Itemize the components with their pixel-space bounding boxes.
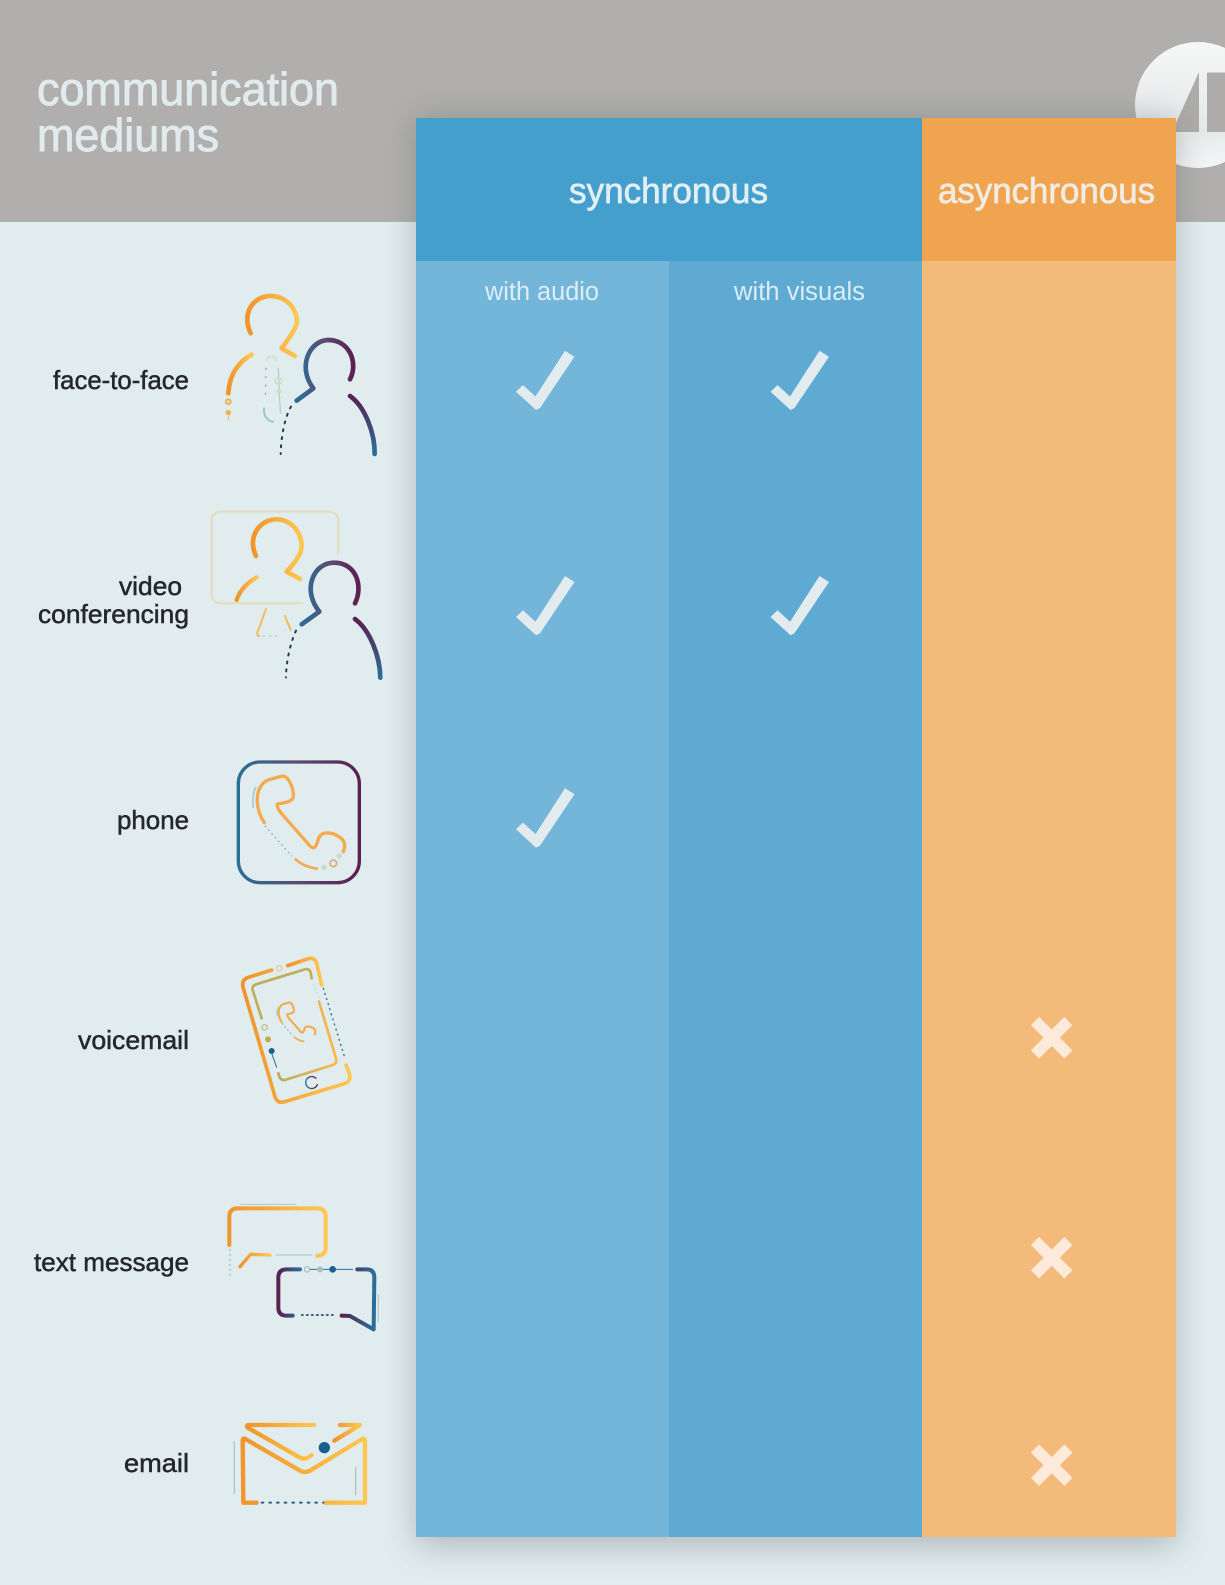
column: with visuals xyxy=(669,261,922,1537)
label: email: email xyxy=(124,1448,189,1478)
icon: text message xyxy=(229,1204,378,1329)
logo circle xyxy=(1135,42,1225,168)
title xyxy=(37,63,339,161)
panel: synchronous header xyxy=(416,118,922,261)
check: video audio xyxy=(516,576,574,635)
panel: synchronous header: synchronous xyxy=(569,170,768,211)
column: with audio xyxy=(416,261,669,1537)
label: video conferencing: video xyxy=(119,571,182,601)
icon: video conferencing xyxy=(212,512,380,678)
icon: voicemail xyxy=(243,958,350,1102)
cross: email xyxy=(1035,1448,1068,1482)
icon: phone xyxy=(238,762,359,883)
title: communication xyxy=(37,63,339,115)
table shadow xyxy=(416,118,1176,1546)
column: with audio: with audio xyxy=(484,278,599,306)
check: phone audio xyxy=(516,788,574,848)
title: mediums xyxy=(37,109,219,161)
panel: asynchronous header: asynchronous xyxy=(938,170,1155,211)
cross: voicemail xyxy=(1035,1021,1068,1054)
label: voicemail: voicemail xyxy=(78,1025,189,1055)
cross: text message xyxy=(1035,1241,1068,1274)
check: face-to-face visuals xyxy=(770,351,829,410)
label: text message: text message xyxy=(34,1247,189,1277)
check: face-to-face audio xyxy=(516,351,574,410)
label: video conferencing xyxy=(38,571,189,629)
check: video visuals xyxy=(770,576,829,635)
icon: face-to-face xyxy=(226,296,375,454)
icon: email xyxy=(234,1425,365,1503)
panel: asynchronous header xyxy=(922,118,1176,261)
label: face-to-face: face-to-face xyxy=(53,365,189,395)
header band xyxy=(0,0,1225,222)
label: video conferencing: conferencing xyxy=(38,599,189,629)
column: asynchronous body xyxy=(922,261,1176,1537)
column: with visuals: with visuals xyxy=(733,278,865,306)
label: phone: phone xyxy=(117,805,189,835)
